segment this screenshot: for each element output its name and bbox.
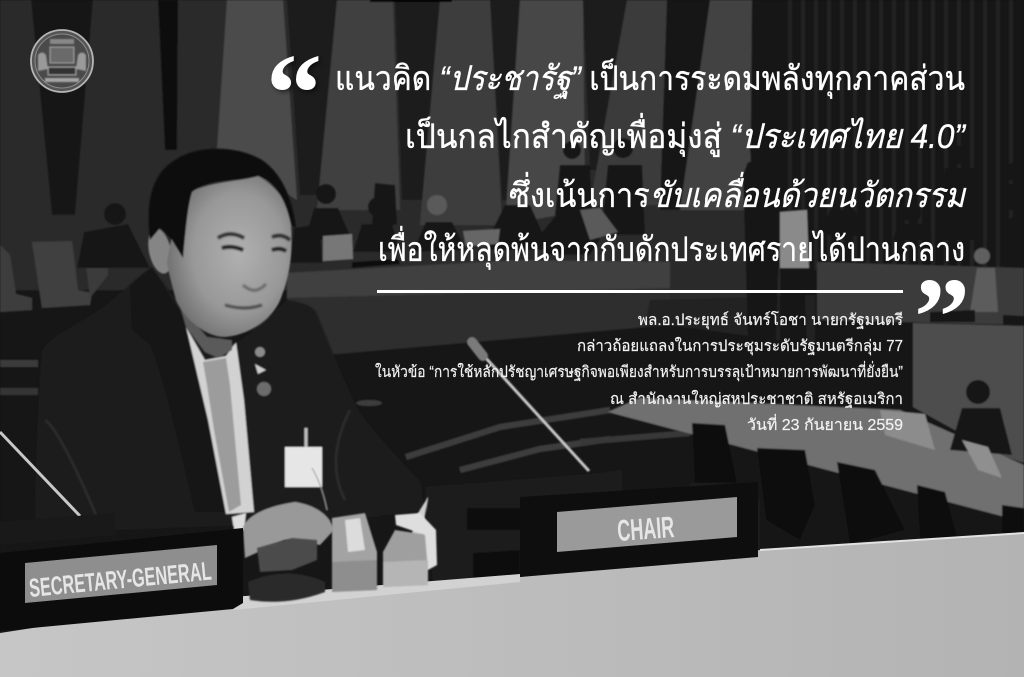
hair <box>149 149 296 258</box>
right side table <box>608 398 1024 522</box>
speaker attribution: วันที่ 23 กันยายน 2559 <box>747 414 903 434</box>
nameplate: secretary-general <box>0 528 243 631</box>
gavel <box>248 538 325 602</box>
suit <box>35 267 424 530</box>
opening quote mark: “ <box>268 34 324 158</box>
far right wall <box>913 323 1024 463</box>
shirt and tie <box>186 327 254 514</box>
face <box>167 176 292 337</box>
quotation text: แนวคิด “ประชารัฐ” เป็นการระดมพลังทุกภาคส่วน <box>335 58 965 99</box>
nameplate: secretary-general: SECRETARY-GENERAL <box>28 556 213 603</box>
neck <box>180 306 232 358</box>
floor <box>293 325 815 520</box>
divider rule <box>377 290 903 293</box>
quotation text: ซึ่งเน้นการขับเคลื่อนด้วยนวัตกรรม <box>509 172 966 215</box>
seal emblem <box>31 30 93 92</box>
water bottles <box>332 513 437 592</box>
nameplate: chair: CHAIR <box>616 511 676 548</box>
left console <box>0 513 115 545</box>
nameplate: chair <box>520 482 758 577</box>
cuff and hand <box>232 513 246 530</box>
monitor behind chair plate <box>410 470 622 585</box>
opening quote mark: “ <box>266 32 322 156</box>
id badge <box>285 447 322 487</box>
speaker attribution: ณ สำนักงานใหญ่สหประชาชาติ สหรัฐอเมริกา <box>610 390 903 408</box>
background people <box>77 138 1024 360</box>
left chairs and wall <box>32 241 92 308</box>
lapel pins <box>255 347 265 357</box>
microphone left <box>0 432 80 516</box>
closing quote mark: ” <box>914 256 970 380</box>
speaker attribution: ในหัวข้อ “การใช้หลักปรัชญาเศรษฐกิจพอเพียงสำหรับการบรรลุเป้าหมายการพัฒนาที่ยั่งยืน” <box>375 361 903 382</box>
ear <box>144 226 176 276</box>
foreground desk <box>0 533 1024 677</box>
seated person, laptops and chairs at right <box>966 380 990 404</box>
conference desk band <box>287 260 670 298</box>
speaker attribution <box>375 311 903 434</box>
man in suit <box>35 149 424 558</box>
quotation text: เป็นกลไกสำคัญเพื่อมุ่งสู่ “ประเทศไทย 4.0” <box>405 113 967 157</box>
microphone right <box>472 342 589 471</box>
quotation text <box>335 58 967 270</box>
brows, eyes, mouth <box>218 234 290 308</box>
speaker attribution: พล.อ.ประยุทธ์ จันทร์โอชา นายกรัฐมนตรี <box>638 311 903 330</box>
speaker attribution: กล่าวถ้อยแถลงในการประชุมระดับรัฐมนตรีกลุ่ม 77 <box>577 337 903 356</box>
